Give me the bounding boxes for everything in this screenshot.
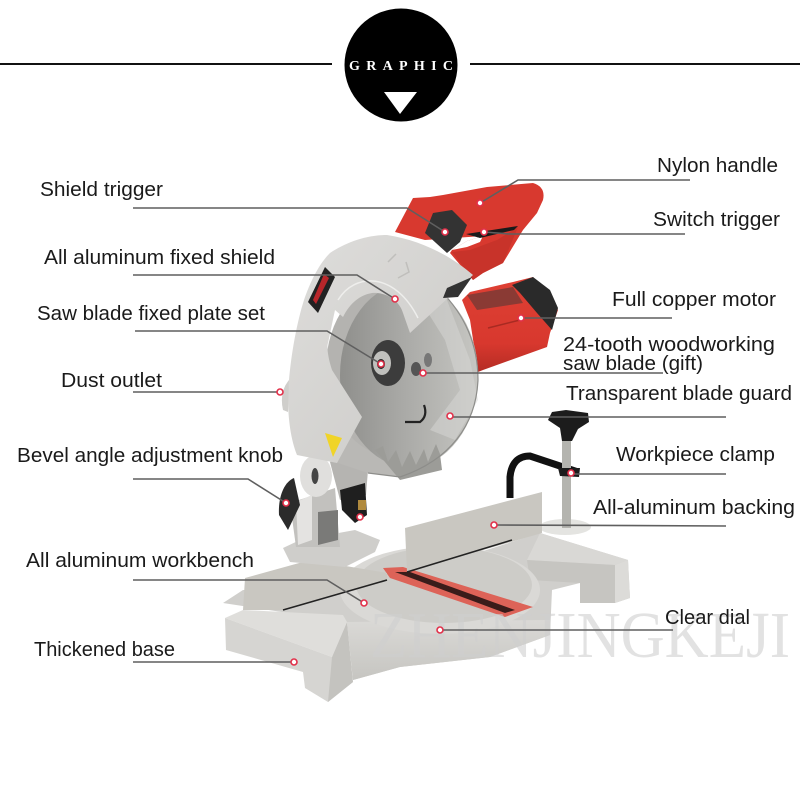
label: switch trigger: Switch trigger xyxy=(653,209,780,231)
label: bevel angle adjustment knob xyxy=(17,445,363,520)
brand mark xyxy=(313,274,329,304)
rear lock and brass screw xyxy=(340,483,367,523)
motor housing xyxy=(462,277,558,372)
label: all-aluminum backing: All-aluminum backing xyxy=(593,497,795,519)
turntable xyxy=(340,546,540,634)
bevel knob xyxy=(279,478,300,530)
label: thickened base: Thickened base xyxy=(34,639,175,661)
label: dust outlet xyxy=(61,370,283,395)
label: clear dial: Clear dial xyxy=(665,607,750,629)
label: all aluminum workbench xyxy=(26,550,367,606)
label: 24-tooth woodworking saw blade: 24-tooth woodworking xyxy=(563,334,775,356)
shield trigger block xyxy=(425,210,467,253)
lower clear guard backing xyxy=(335,417,425,477)
label: clear dial xyxy=(437,607,750,633)
label: transparent blade guard: Transparent blade guard xyxy=(566,383,792,405)
right fence xyxy=(405,492,542,572)
handle opening and trigger xyxy=(452,226,518,250)
shield inner rim and hood xyxy=(338,254,472,318)
label: 24-tooth woodworking saw blade xyxy=(420,334,775,376)
label: saw blade fixed plate set xyxy=(37,303,384,367)
saw base xyxy=(223,533,630,702)
clamp screw and knob xyxy=(539,410,591,535)
clamp arm xyxy=(510,456,578,498)
warning sticker xyxy=(325,433,342,457)
label: shield trigger: Shield trigger xyxy=(40,179,163,201)
label: workpiece clamp: Workpiece clamp xyxy=(616,444,775,466)
label: transparent blade guard xyxy=(447,383,792,419)
transparent blade guard outline xyxy=(368,290,478,477)
product: miter saw illustration xyxy=(223,183,630,702)
label: shield trigger xyxy=(40,179,448,235)
label: 24-tooth woodworking saw blade: saw blade (gift) xyxy=(563,353,703,375)
brand badge xyxy=(308,267,335,313)
dust outlet xyxy=(282,380,289,412)
saw blade xyxy=(340,283,478,480)
label: switch trigger xyxy=(481,209,780,235)
label: workpiece clamp xyxy=(568,444,775,476)
label: thickened base xyxy=(34,639,297,665)
label: full copper motor xyxy=(518,289,776,321)
label: all aluminum fixed shield: All aluminum fixed shield xyxy=(44,247,275,269)
label: all aluminum workbench: All aluminum workbench xyxy=(26,550,254,572)
label: saw blade fixed plate set: Saw blade fixed plate set xyxy=(37,303,265,325)
label: nylon handle: Nylon handle xyxy=(657,155,778,177)
label: all-aluminum backing xyxy=(491,497,795,528)
header graphic badge xyxy=(0,8,800,122)
label: bevel angle adjustment knob: Bevel angle adjustment knob xyxy=(17,445,283,467)
hub plate xyxy=(371,340,405,386)
column and mount xyxy=(283,448,380,567)
label: full copper motor: Full copper motor xyxy=(612,289,776,311)
red kerf strip xyxy=(383,567,533,617)
header graphic badge: GRAPHIC xyxy=(349,59,453,74)
label: all aluminum fixed shield xyxy=(44,247,398,302)
aluminium fixed shield xyxy=(288,235,473,463)
label: dust outlet: Dust outlet xyxy=(61,370,162,392)
blade recess xyxy=(326,280,458,456)
label: nylon handle xyxy=(477,155,778,206)
handle underside shade xyxy=(452,227,518,280)
nylon handle xyxy=(395,183,544,280)
left fence xyxy=(243,560,387,610)
